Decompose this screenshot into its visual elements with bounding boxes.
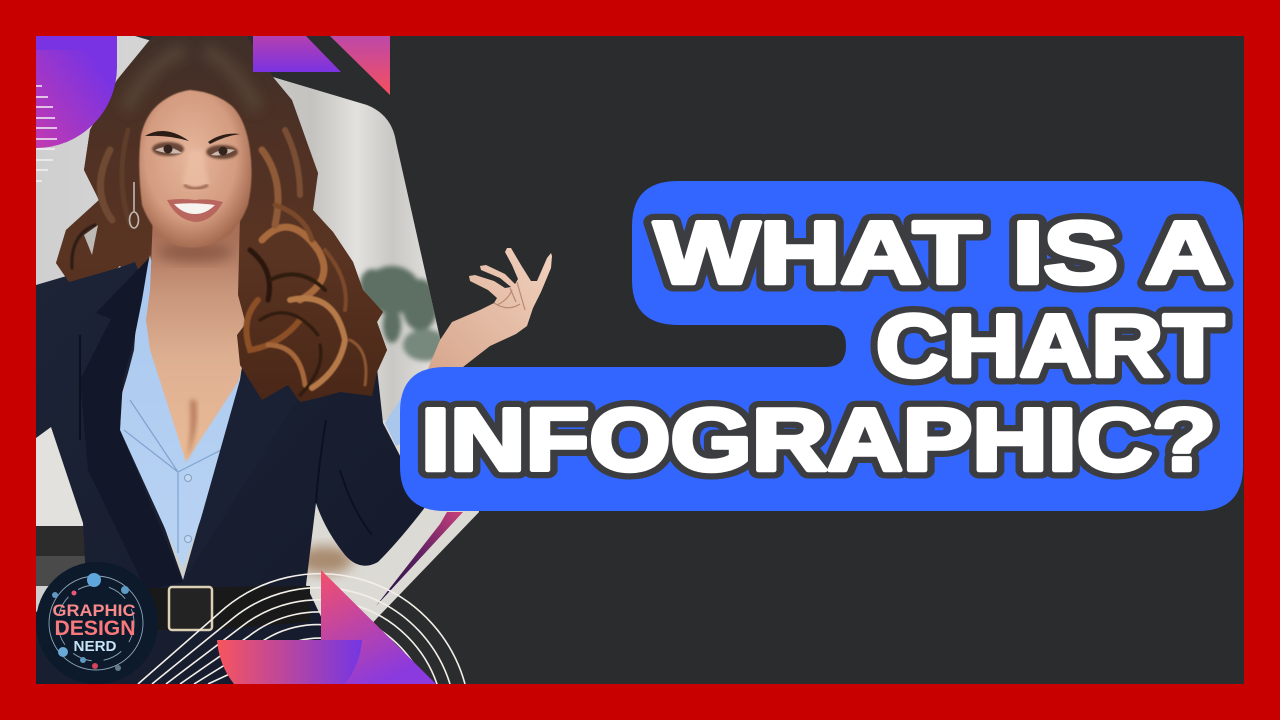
top pink triangle: [330, 36, 390, 95]
bottom gradient triangle: [321, 570, 436, 684]
belt: [147, 586, 310, 630]
finger creases: [494, 282, 525, 310]
eye left: [152, 142, 184, 156]
blurred plant: [360, 266, 447, 361]
shirt buttons: [184, 474, 192, 542]
blue title shape: [400, 181, 1243, 511]
hair curl highlights: [72, 130, 366, 395]
hand and fingers: [425, 248, 552, 376]
logo text: GRAPHIC: [52, 601, 136, 620]
title: [421, 203, 1226, 489]
brow left: [145, 131, 189, 141]
title line 1 outline: WHAT IS A: [654, 203, 1226, 302]
bottom gradient half disc: [217, 640, 362, 684]
sleeve fold line: [80, 335, 372, 535]
chin shadow on neck: [157, 242, 233, 262]
woman presenting: [36, 36, 430, 684]
jacket left side and torso: [36, 262, 426, 684]
hair front right: [237, 36, 387, 402]
title line 1: WHAT IS A: [654, 203, 1226, 302]
hand: [425, 248, 552, 376]
title line 3 outline: INFOGRAPHIC?: [421, 390, 1216, 489]
logo text: NERD: [74, 638, 117, 655]
logo text: DESIGN: [54, 617, 136, 640]
logo orbs: [52, 573, 129, 671]
brow right: [208, 134, 240, 144]
hair front left: [56, 40, 150, 282]
jacket lapel right: [200, 380, 240, 522]
hair crown sheen: [125, 50, 258, 110]
nostril shade: [184, 185, 208, 188]
cleavage shade: [186, 400, 197, 460]
logo circuit rings: [49, 576, 143, 670]
shirt placket: [124, 400, 225, 553]
title line 2: CHART: [876, 296, 1224, 395]
jacket lapel left: [80, 258, 183, 590]
belt buckle: [169, 587, 212, 630]
top-left decorative circle: [36, 36, 117, 148]
hair back mass: [56, 36, 387, 402]
logo badge: [36, 562, 158, 684]
shirt cuff: [385, 398, 402, 446]
title line 3: INFOGRAPHIC?: [421, 390, 1216, 489]
eye right: [206, 145, 238, 159]
lips: [167, 199, 223, 222]
logo text: [53, 604, 135, 651]
background gap in left curl: [84, 225, 98, 255]
logo disc: [36, 562, 158, 684]
top-left white lines: [36, 86, 57, 181]
nose: [183, 152, 209, 187]
face: [139, 90, 252, 248]
photo backdrop: [36, 36, 479, 622]
backdrop wall: [36, 36, 479, 622]
neck and chest skin: [146, 215, 250, 462]
swoosh accent: [376, 512, 463, 606]
concentric white arcs: [138, 574, 465, 684]
title line 2 outline: CHART: [876, 296, 1224, 395]
earring: [130, 182, 138, 228]
top purple shape: [253, 36, 341, 72]
shirt: [120, 255, 240, 568]
teeth: [174, 203, 215, 214]
